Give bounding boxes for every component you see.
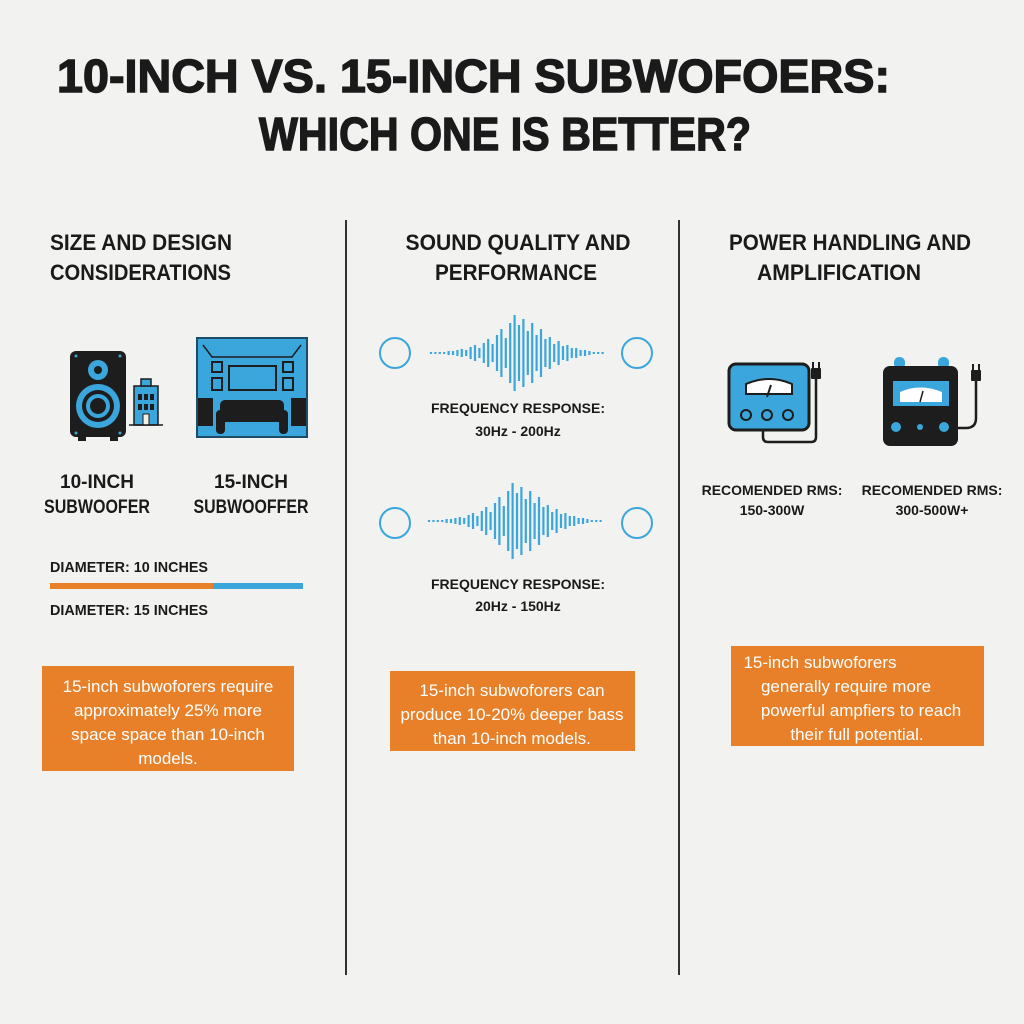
callout: bass bbox=[390, 671, 635, 751]
label: 10-inch subwoofer: SUBWOOFER bbox=[44, 497, 150, 518]
text: rms 2: 300-500W+ bbox=[896, 502, 968, 518]
label: 15-inch subwoofer: 15-INCH bbox=[214, 472, 288, 493]
icon: building bbox=[129, 379, 163, 425]
heading: sound quality bbox=[406, 230, 630, 285]
diameter comparison bar bbox=[50, 559, 303, 619]
heading: sound quality: PERFORMANCE bbox=[435, 260, 597, 285]
icon: amplifier 2 bbox=[883, 357, 981, 446]
callout: bass: 15-inch subwoforers can bbox=[419, 681, 605, 700]
callout: amplifiers: generally require more bbox=[761, 677, 931, 696]
title: 10-INCH VS. 15-INCH SUBWOFOERS: bbox=[57, 50, 890, 102]
text: rms 1 bbox=[702, 482, 842, 518]
callout: bass: produce 10-20% deeper bass bbox=[400, 705, 624, 724]
callout: space bbox=[42, 666, 294, 771]
callout: amplifiers bbox=[731, 646, 984, 746]
callout: space: space space than 10-inch bbox=[71, 725, 265, 744]
text: rms 2: RECOMENDED RMS: bbox=[862, 482, 1002, 498]
panel: size and design bbox=[42, 230, 309, 771]
callout: space: 15-inch subwoforers require bbox=[63, 677, 273, 696]
callout: space: models. bbox=[138, 749, 198, 768]
diameter comparison bar: DIAMETER: 10 INCHES bbox=[50, 559, 208, 576]
heading: size and design: SIZE AND DESIGN bbox=[50, 230, 232, 255]
icon: home theater room bbox=[197, 338, 307, 437]
label: 10-inch subwoofer bbox=[44, 472, 150, 518]
callout: space: approximately 25% more bbox=[74, 701, 262, 720]
heading: size and design bbox=[50, 230, 232, 285]
heading: size and design: CONSIDERATIONS bbox=[50, 260, 231, 285]
heading: power handling: AMPLIFICATION bbox=[757, 260, 921, 285]
panel: sound quality bbox=[380, 230, 652, 751]
callout: amplifiers: powerful ampfiers to reach bbox=[761, 701, 961, 720]
text: rms 2 bbox=[862, 482, 1002, 518]
callout: amplifiers: 15-inch subwoforers bbox=[743, 653, 897, 672]
icon: 10-inch speaker bbox=[70, 351, 126, 441]
text: frequency response 1: FREQUENCY RESPONSE: bbox=[431, 400, 605, 416]
text: frequency response 1 bbox=[431, 400, 605, 439]
label: 15-inch subwoofer bbox=[194, 472, 309, 518]
callout: amplifiers: their full potential. bbox=[790, 725, 924, 744]
text: frequency response 2: 20Hz - 150Hz bbox=[475, 598, 561, 614]
heading: power handling: POWER HANDLING AND bbox=[729, 230, 971, 255]
text: rms 1: 150-300W bbox=[740, 502, 805, 518]
heading: power handling bbox=[729, 230, 971, 285]
waveform 2 bbox=[380, 483, 652, 559]
callout: bass: than 10-inch models. bbox=[433, 729, 591, 748]
heading: sound quality: SOUND QUALITY AND bbox=[406, 230, 630, 255]
waveform 1 bbox=[380, 315, 652, 391]
diameter comparison bar: DIAMETER: 15 INCHES bbox=[50, 602, 208, 619]
label: 10-inch subwoofer: 10-INCH bbox=[60, 472, 134, 493]
text: frequency response 1: 30Hz - 200Hz bbox=[475, 423, 561, 439]
label: 15-inch subwoofer: SUBWOOFFER bbox=[194, 497, 309, 518]
panel: power handling bbox=[702, 230, 1002, 746]
text: rms 1: RECOMENDED RMS: bbox=[702, 482, 842, 498]
text: frequency response 2 bbox=[431, 576, 605, 614]
title bbox=[57, 50, 890, 160]
text: frequency response 2: FREQUENCY RESPONSE: bbox=[431, 576, 605, 592]
title: WHICH ONE IS BETTER? bbox=[259, 108, 751, 160]
icon: amplifier 1 bbox=[729, 362, 821, 442]
